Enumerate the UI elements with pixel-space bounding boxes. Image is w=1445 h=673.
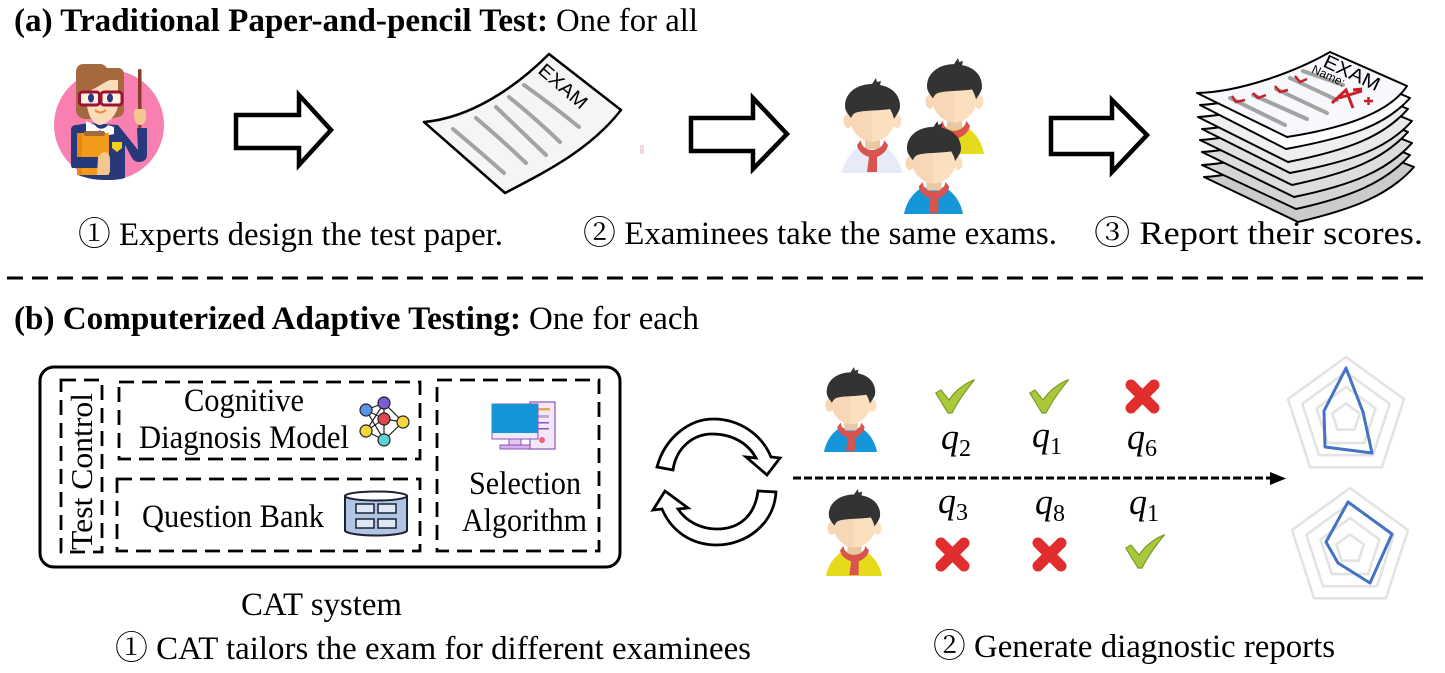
module: question bank <box>117 479 420 551</box>
label: q6: q <box>1127 417 1145 457</box>
heading: (a) Traditional Paper-and-pencil Test: (a) Traditional Paper-and-pencil Test: <box>14 3 548 39</box>
chart: radar diagnostic report one <box>1288 357 1404 467</box>
icon: neural network <box>360 397 409 446</box>
chart: radar diagnostic report two <box>1292 488 1408 598</box>
module: selection algorithm: Algorithm <box>462 503 587 539</box>
heading: (b) Computerized Adaptive Testing: (b) Computerized Adaptive Testing: <box>14 301 521 337</box>
icon: three examinees <box>842 58 984 214</box>
caption: step 3 report scores: ③ Report their scores. <box>1094 216 1423 252</box>
icon: computer <box>492 402 555 449</box>
caption: step 1 experts design: ① Experts design the test paper. <box>78 217 503 253</box>
heading: (b) Computerized Adaptive Testing: One for each <box>529 301 699 337</box>
caption: CAT tailors the exam: ① CAT tailors the exam for different examinees <box>115 631 751 667</box>
icon: correct q1 second <box>1126 535 1164 568</box>
label: q2: 2 <box>959 436 971 462</box>
row: examinee one responses <box>824 367 1157 462</box>
module: cognitive diagnosis model <box>119 382 420 459</box>
icon: correct q1 <box>1030 380 1068 413</box>
icon: database <box>345 492 407 536</box>
module: question bank: Question Bank <box>142 499 324 535</box>
caption: CAT system: CAT system <box>241 587 402 623</box>
label: q1: q <box>1032 415 1050 455</box>
label: q3: 3 <box>956 500 968 526</box>
panel: CAT system <box>40 367 620 567</box>
arrow: dashed timeline <box>793 472 1286 485</box>
arrow: step 2 to step 3 <box>691 98 787 169</box>
icon: wrong q3 <box>941 543 964 566</box>
icon: stack of scored exams: EXAM <box>1320 51 1383 96</box>
label: q1 second: q <box>1129 482 1147 522</box>
icon: stack of scored exams <box>1197 51 1414 222</box>
module: selection algorithm <box>437 380 599 551</box>
icon: exam paper <box>424 54 621 193</box>
label: q3: q <box>938 481 956 521</box>
caption: generate diagnostic reports: ② Generate diagnostic reports <box>933 629 1335 665</box>
module: cognitive diagnosis model: Cognitive <box>184 383 304 419</box>
module: selection algorithm: Selection <box>469 466 581 502</box>
caption: step 2 examinees take exams: ② Examinees take the same exams. <box>583 216 1057 252</box>
icon: stack of scored exams: Name: <box>1310 62 1347 90</box>
label: q2: q <box>941 417 959 457</box>
icon: examinee blue <box>824 367 877 452</box>
icon: examinee yellow <box>826 489 882 576</box>
label: q8: 8 <box>1053 501 1065 527</box>
label: q1 second: 1 <box>1147 501 1159 527</box>
heading: (a) Traditional Paper-and-pencil Test: One for all <box>556 3 698 39</box>
icon: exam paper: EXAM <box>534 60 591 114</box>
label: q1: 1 <box>1050 434 1062 460</box>
icon: correct q2 <box>936 380 974 413</box>
label: q6: 6 <box>1145 436 1157 462</box>
arrow: step 3 to report <box>1051 100 1147 172</box>
module: test control: Test Control <box>64 393 99 550</box>
row: examinee two responses <box>826 481 1164 576</box>
icon: teacher expert <box>54 64 164 180</box>
arrows: adaptive cycle <box>653 419 780 545</box>
arrow: step 1 to step 2 <box>236 95 331 165</box>
icon: wrong q8 <box>1038 543 1061 566</box>
module: cognitive diagnosis model: Diagnosis Model <box>139 420 349 456</box>
label: q8: q <box>1035 482 1053 522</box>
icon: wrong q6 <box>1131 385 1154 408</box>
